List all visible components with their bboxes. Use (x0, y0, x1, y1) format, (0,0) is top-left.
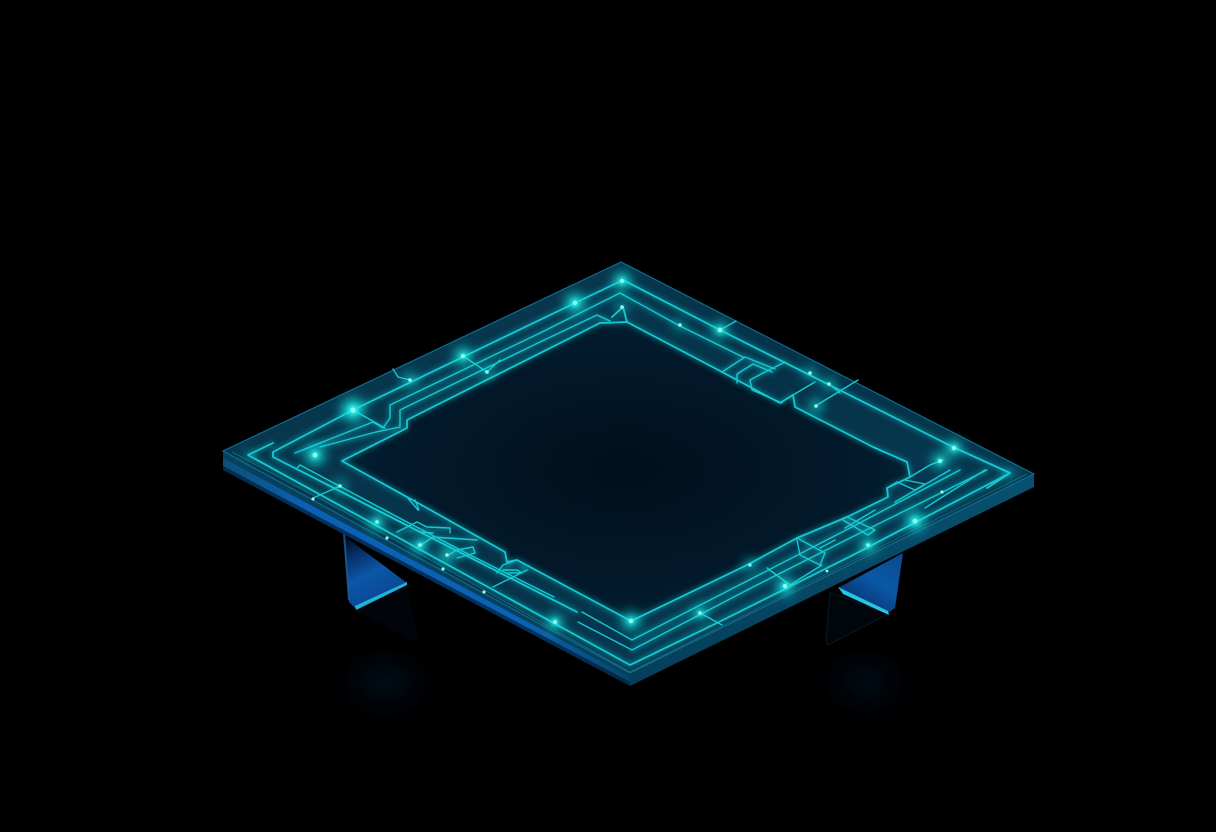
right support leg (826, 553, 903, 645)
trace: bottom left switchback (397, 497, 527, 587)
trace: second ring (582, 470, 960, 640)
plate side edges (223, 451, 1034, 686)
trace: inner boundary (342, 307, 910, 621)
circuit traces (248, 280, 1010, 665)
trace: upper left second ring (295, 293, 743, 453)
trace: left node branches (297, 356, 500, 498)
trace: upper left third ring (320, 315, 610, 447)
plate top surface (223, 262, 1034, 673)
left support leg (343, 533, 418, 642)
glowing node cores (311, 279, 956, 624)
thin plate rim line (232, 452, 1027, 672)
trace: outer ring (248, 280, 1010, 665)
trace: third ring (578, 470, 987, 650)
circuit traces glow layer (248, 280, 1010, 665)
reflection glow under the plate (355, 668, 895, 696)
trace: bottom left inner runs (300, 465, 554, 597)
glowing node halos (245, 273, 1013, 629)
trace: top right switchback (720, 321, 858, 405)
node inner glow (311, 278, 958, 626)
trace: bottom right switchback (700, 510, 875, 625)
trace: right corner switchback (887, 460, 985, 508)
inner dark panel (342, 318, 910, 621)
